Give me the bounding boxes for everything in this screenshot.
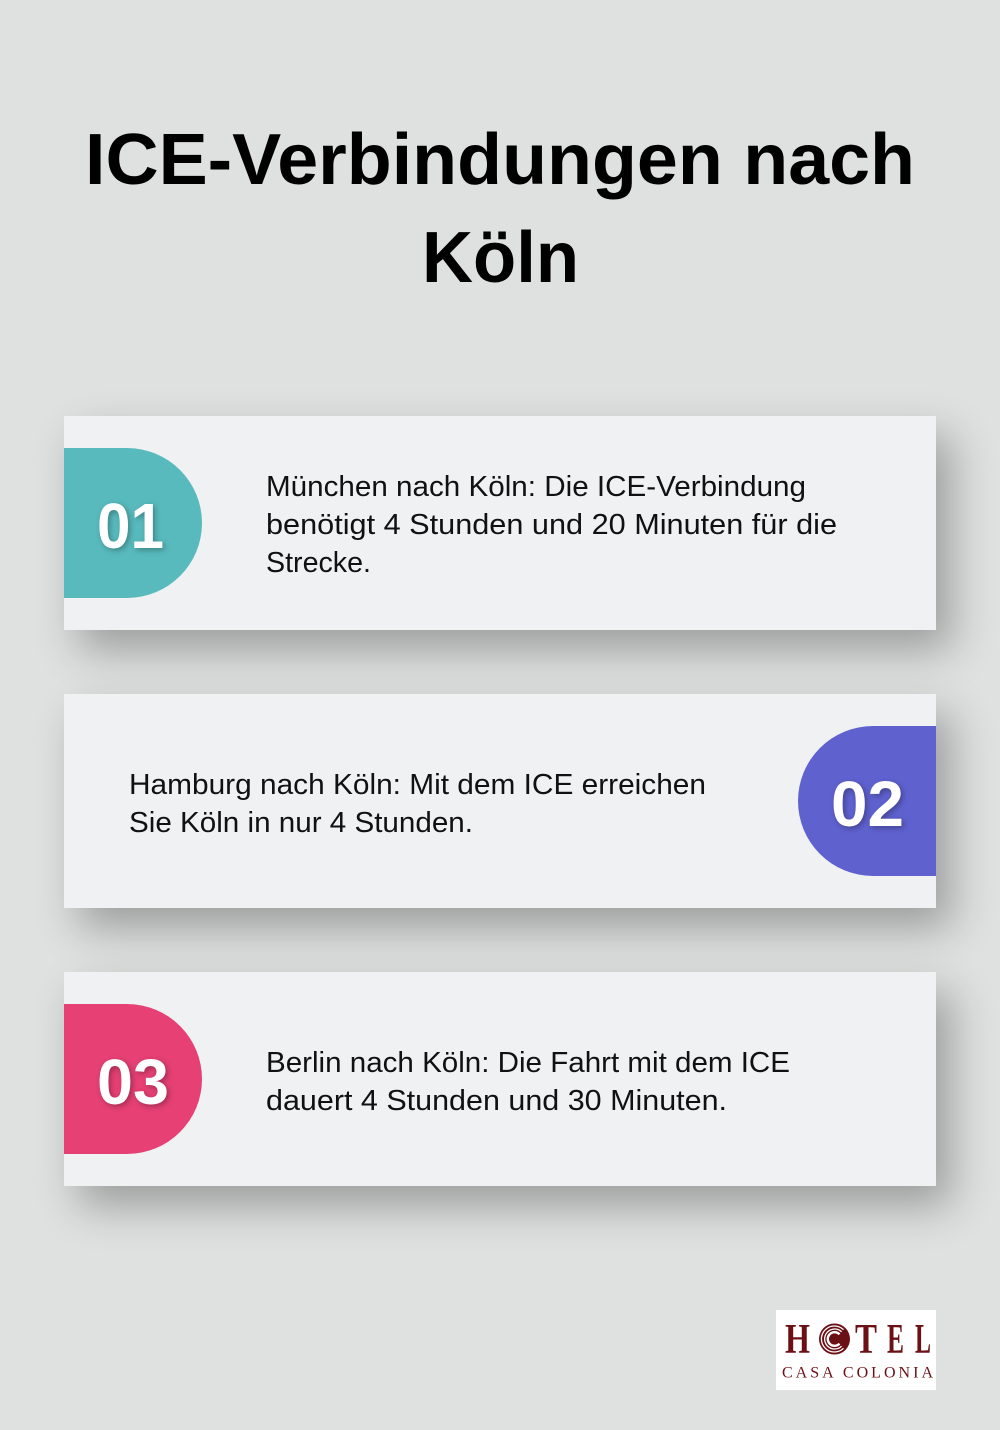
panel: Berlin nach Köln bbox=[64, 972, 936, 1186]
title: ICE-Verbindungen nach bbox=[85, 120, 915, 200]
panel: München nach Köln bbox=[64, 416, 936, 630]
text: München nach Köln: München nach Köln: Die ICE-Verbindung bbox=[266, 471, 806, 503]
badge 01: 01 bbox=[97, 490, 164, 562]
text: München nach Köln: Strecke. bbox=[266, 547, 371, 579]
text: Berlin nach Köln: dauert 4 Stunden und 30 Minuten. bbox=[266, 1085, 727, 1117]
badge 02: 02 bbox=[831, 768, 904, 840]
logo: Hotel Casa Colonia: CASA COLONIA bbox=[782, 1364, 933, 1382]
badge 01 bbox=[64, 448, 202, 598]
badge 02 bbox=[798, 726, 936, 876]
text: Berlin nach Köln bbox=[266, 1047, 790, 1117]
logo: Hotel Casa Colonia: T bbox=[855, 1317, 877, 1363]
text: München nach Köln: benötigt 4 Stunden und 20 Minuten für die bbox=[266, 509, 837, 541]
logo: Hotel Casa Colonia: L bbox=[915, 1317, 931, 1363]
text: Berlin nach Köln: Berlin nach Köln: Die Fahrt mit dem ICE bbox=[266, 1047, 790, 1079]
text: Hamburg nach Köln: Hamburg nach Köln: Mit dem ICE erreichen bbox=[129, 769, 706, 801]
logo: Hotel Casa Colonia: H bbox=[785, 1317, 810, 1363]
title: Köln bbox=[422, 218, 579, 298]
title bbox=[85, 120, 915, 298]
panel: Hamburg nach Köln bbox=[64, 694, 936, 908]
logo: Hotel Casa Colonia: E bbox=[887, 1317, 904, 1363]
text: Hamburg nach Köln bbox=[129, 769, 706, 839]
text: Hamburg nach Köln: Sie Köln in nur 4 Stunden. bbox=[129, 807, 473, 839]
text: München nach Köln bbox=[266, 471, 837, 579]
logo: Hotel Casa Colonia bbox=[776, 1310, 936, 1390]
icon: concentric circle C bbox=[819, 1324, 850, 1354]
badge 03 bbox=[64, 1004, 202, 1154]
badge 03: 03 bbox=[97, 1046, 169, 1118]
